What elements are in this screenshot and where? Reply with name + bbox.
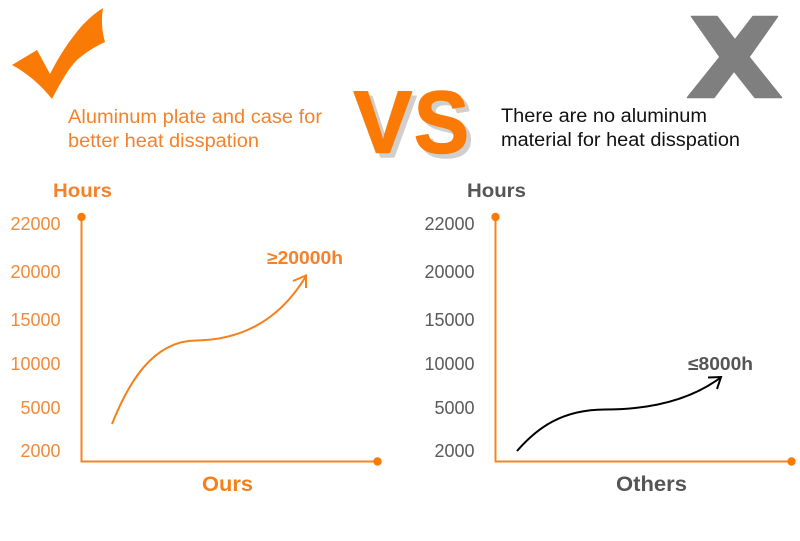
- y-axis labels: 5000: [20, 398, 60, 418]
- axis title: hours: Hours: [53, 181, 112, 202]
- y-axis labels: 15000: [10, 310, 60, 330]
- y-axis labels: 10000: [10, 354, 60, 374]
- text: others description: [501, 105, 740, 151]
- x-axis label: others: Others: [616, 472, 687, 496]
- curve arrow: ours: [112, 276, 306, 424]
- text: ours description: [68, 106, 322, 152]
- y-axis labels: 2000: [20, 441, 60, 461]
- heading: VS: [354, 72, 474, 176]
- y-axis labels: [10, 214, 60, 461]
- y-axis labels: 22000: [424, 214, 474, 234]
- y-axis labels: 15000: [424, 310, 474, 330]
- callout: at most 8000h: ≤8000h: [688, 354, 753, 374]
- y-axis labels: [424, 214, 474, 461]
- axes: [77, 213, 382, 466]
- text: others description: There are no aluminum: [501, 105, 707, 127]
- y-axis labels: 2000: [434, 441, 474, 461]
- axis title: hours: Hours: [467, 181, 526, 202]
- panel: ours chart: [10, 181, 382, 496]
- callout: at least 20000h: ≥20000h: [267, 248, 343, 268]
- text: ours description: better heat disspation: [68, 130, 259, 152]
- heading: VS: V: [354, 72, 412, 172]
- panel: others chart: [424, 181, 796, 496]
- text: ours description: Aluminum plate and case for: [68, 106, 322, 128]
- axes: [491, 213, 796, 466]
- y-axis labels: 22000: [10, 214, 60, 234]
- curve arrow: others: [517, 377, 721, 451]
- icon: orange check mark: [12, 8, 105, 99]
- y-axis labels: 10000: [424, 354, 474, 374]
- y-axis labels: 5000: [434, 398, 474, 418]
- heading: VS: V: [358, 77, 417, 176]
- icon: gray X mark: [688, 16, 782, 98]
- text: others description: material for heat disspation: [501, 129, 740, 151]
- y-axis labels: 20000: [10, 262, 60, 282]
- heading: VS: S: [414, 72, 469, 172]
- y-axis labels: 20000: [424, 262, 474, 282]
- x-axis label: ours: Ours: [202, 472, 253, 496]
- heading: VS: S: [418, 77, 474, 176]
